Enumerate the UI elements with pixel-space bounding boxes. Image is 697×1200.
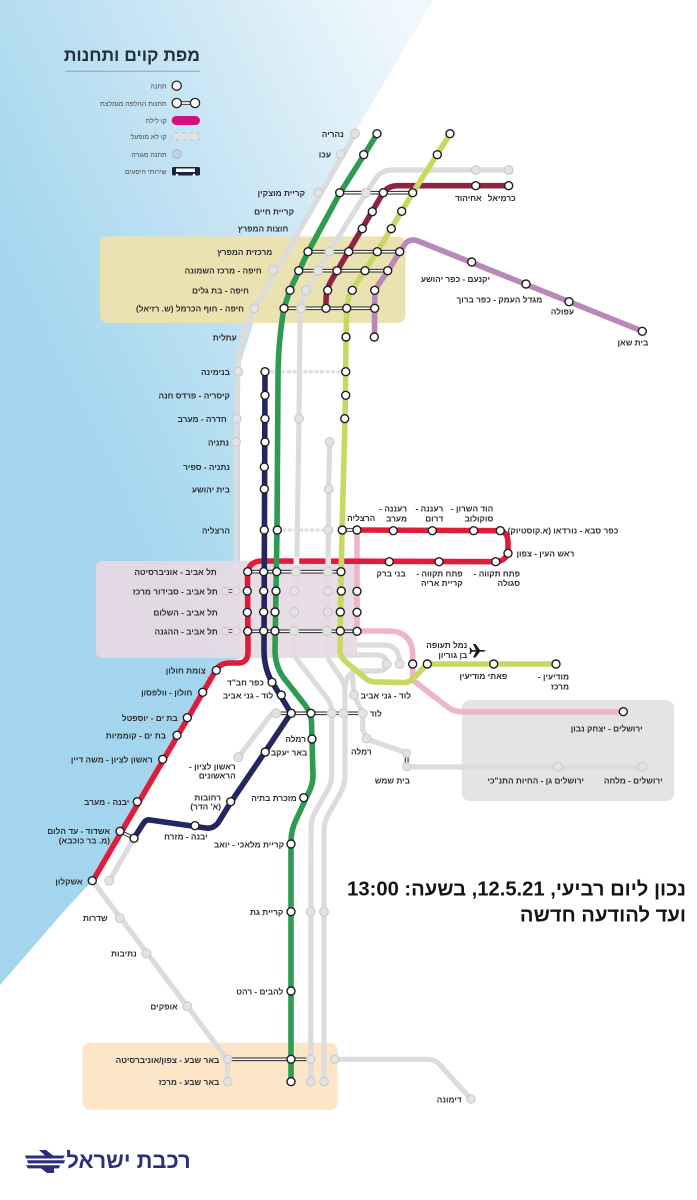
station labels: south coast and centre: (א' הדר) xyxy=(190,802,221,812)
station labels: north and coast: חיפה - בת גלים xyxy=(192,286,249,296)
legend: תחנות החלפה מומלצת xyxy=(100,100,167,108)
station labels: south coast and centre: בת ים - יוספטל xyxy=(122,713,178,723)
station labels: airport, Modi'in, Jerusalem: נמל תעופה xyxy=(426,640,467,650)
station labels: south coast and centre: (מ. בר כוכבא) xyxy=(59,836,110,846)
station labels: Galilee and valley: יקנעם - כפר יהושע xyxy=(421,274,490,284)
legend: קו לילה xyxy=(146,117,167,125)
station labels: south coast and centre: הראשונים xyxy=(199,770,236,780)
line: light pink Herzliya to Jerusalem xyxy=(357,530,623,712)
station labels: north and coast: חיפה - מרכז השמונה xyxy=(185,266,262,276)
station labels: Sharon and Tel Aviv: תל אביב - ההגנה xyxy=(154,626,218,636)
station labels: airport, Modi'in, Jerusalem: מרכז xyxy=(551,682,569,692)
line: green north to south xyxy=(275,134,377,1081)
station labels: Sharon and Tel Aviv xyxy=(133,504,619,636)
station labels: north and coast: עתלית xyxy=(213,332,237,342)
station labels: south coast and centre: באר יעקב xyxy=(271,748,308,758)
station labels: Galilee and valley: כרמיאל xyxy=(488,193,516,203)
station labels: airport, Modi'in, Jerusalem xyxy=(351,640,663,786)
legend: קו לא מופעל xyxy=(131,133,167,141)
station labels: Sharon and Tel Aviv: סוקולוב xyxy=(465,514,493,524)
station labels: Sharon and Tel Aviv: סגולה xyxy=(498,578,520,588)
logo: Israel Railways: רכבת ישראל xyxy=(66,1148,191,1173)
legend: תחנה סגורה xyxy=(131,152,167,159)
inactive grey lines xyxy=(93,134,642,1099)
station labels: south coast and centre: מזכרת בתיה xyxy=(251,793,297,803)
background: sea xyxy=(0,0,433,985)
station labels: south coast and centre: דימונה xyxy=(437,1094,462,1104)
station labels: south coast and centre: יבנה - מערב xyxy=(84,797,129,807)
line: navy xyxy=(134,372,291,838)
notice text xyxy=(347,878,686,926)
station labels: airport, Modi'in, Jerusalem: ירושלים - יצחק נבון xyxy=(571,724,643,734)
station labels: north and coast: בנימינה xyxy=(201,367,231,377)
station labels: Sharon and Tel Aviv: בני ברק xyxy=(376,568,406,578)
title: מפת קוים ותחנות xyxy=(64,45,200,65)
station labels: airport, Modi'in, Jerusalem: בן גוריון xyxy=(438,650,468,660)
closed / inactive stations xyxy=(105,129,647,1103)
line: maroon Karmiel xyxy=(326,186,509,308)
station labels: south coast and centre: כפר חב"ד xyxy=(227,678,264,688)
station labels: Sharon and Tel Aviv: ראש העין - צפון xyxy=(516,548,575,558)
station labels: Sharon and Tel Aviv: פתח תקווה - xyxy=(474,568,520,578)
station labels: south coast and centre: אופקים xyxy=(150,1002,178,1012)
station labels: south coast and centre: רחובות xyxy=(194,792,221,802)
station labels: north and coast: הרצליה xyxy=(202,526,230,536)
station labels: Sharon and Tel Aviv: כפר סבא - נורדאו (א.קוסטיוק) xyxy=(508,526,619,536)
station labels: south coast and centre: קריית מלאכי - יואב xyxy=(214,840,284,850)
station labels: Galilee and valley xyxy=(421,193,649,348)
station labels: north and coast: קריית חיים xyxy=(254,206,294,216)
station labels: Sharon and Tel Aviv: פתח תקווה - xyxy=(416,568,463,578)
station labels: Sharon and Tel Aviv: רעננה - xyxy=(379,504,407,514)
line: red coastal and Sharon xyxy=(93,530,508,881)
legend: תחנה xyxy=(150,84,167,90)
station labels: north and coast: חיפה - חוף הכרמל (ש. רזיאל) xyxy=(136,304,244,314)
interchange links xyxy=(120,193,413,1059)
station labels: south coast and centre: באר שבע - צפון/אוניברסיטה xyxy=(116,1055,220,1065)
station labels: south coast and centre: באר שבע - מרכז xyxy=(159,1077,220,1087)
notice text: ועד להודעה חדשה xyxy=(520,904,686,926)
panel: Jerusalem region xyxy=(462,700,674,801)
legend: שירותי היסעים xyxy=(125,169,167,176)
station labels: Sharon and Tel Aviv: תל אביב - אוניברסיטה xyxy=(134,567,217,577)
station labels: south coast and centre: בת ים - קוממיות xyxy=(106,730,167,740)
station labels: south coast and centre: אשדוד - עד הלום xyxy=(47,826,110,836)
panel: Be'er Sheva region xyxy=(82,1043,338,1110)
line: lime green xyxy=(340,134,556,682)
active stations xyxy=(88,130,646,1086)
station labels: north and coast: נתניה xyxy=(208,438,229,448)
station labels: Galilee and valley: אחיהוד xyxy=(455,193,482,203)
icon: airplane xyxy=(469,644,486,658)
panel: Tel Aviv region xyxy=(96,561,357,658)
station labels: airport, Modi'in, Jerusalem: לוד - גני אביב xyxy=(361,690,411,700)
station labels: north and coast: מרכזית המפרץ xyxy=(217,247,272,257)
line: purple Beit She'an xyxy=(374,240,642,337)
station labels: north and coast xyxy=(136,129,344,536)
station labels: north and coast: קיסריה - פרדס חנה xyxy=(158,390,230,400)
station labels: airport, Modi'in, Jerusalem: בית שמש xyxy=(375,776,411,786)
station labels: Sharon and Tel Aviv: הוד השרון - xyxy=(451,504,493,514)
station labels: north and coast: חוצות המפרץ xyxy=(238,224,288,234)
station labels: Galilee and valley: מגדל העמק - כפר ברוך xyxy=(456,294,542,304)
station labels: south coast and centre: חולון - וולפסון xyxy=(141,688,192,698)
station labels: south coast and centre: ראשון לציון - xyxy=(189,762,236,772)
station labels: Galilee and valley: בית שאן xyxy=(618,338,649,348)
station labels: south coast and centre: צומת חולון xyxy=(166,666,206,676)
notice text: נכון ליום רביעי, 12.5.21, בשעה: 13:00 xyxy=(347,878,686,900)
station labels: south coast and centre: לוד - גני אביב xyxy=(223,690,274,700)
station labels: Sharon and Tel Aviv: מערב xyxy=(386,514,407,524)
station labels: airport, Modi'in, Jerusalem: רמלה xyxy=(351,746,372,756)
station labels: south coast and centre xyxy=(47,666,462,1104)
station labels: south coast and centre: ראשון לציון - משה דיין xyxy=(71,754,153,764)
station labels: Sharon and Tel Aviv: רעננה - xyxy=(416,504,444,514)
station labels: airport, Modi'in, Jerusalem: פאתי מודיעין xyxy=(459,671,507,681)
station labels: Sharon and Tel Aviv: תל אביב - השלום xyxy=(153,608,218,618)
station labels: south coast and centre: שדרות xyxy=(83,913,108,923)
station labels: airport, Modi'in, Jerusalem: ירושלים - מלחה xyxy=(604,776,663,786)
station labels: Sharon and Tel Aviv: הרצליה xyxy=(347,513,375,523)
station labels: south coast and centre: רמלה xyxy=(285,734,306,744)
station labels: north and coast: קריית מוצקין xyxy=(258,188,305,198)
grey crossing over red line xyxy=(294,558,331,565)
station labels: south coast and centre: אשקלון xyxy=(55,876,83,886)
station labels: Sharon and Tel Aviv: דרום xyxy=(425,514,443,524)
station labels: north and coast: נתניה - ספיר xyxy=(183,462,230,472)
station labels: north and coast: נהריה xyxy=(322,129,344,139)
station labels: Galilee and valley: עפולה xyxy=(551,306,574,316)
station labels: south coast and centre: להבים - רהט xyxy=(236,986,284,996)
panel: Haifa region xyxy=(100,236,406,323)
station labels: south coast and centre: נתיבות xyxy=(111,948,137,958)
station labels: south coast and centre: קריית גת xyxy=(250,907,283,917)
station labels: north and coast: חדרה - מערב xyxy=(178,414,227,424)
station labels: Sharon and Tel Aviv: תל אביב - סבידור מרכז xyxy=(133,586,218,596)
legend xyxy=(100,81,200,176)
station labels: south coast and centre: יבנה - מזרח xyxy=(164,832,208,842)
station labels: north and coast: עכו xyxy=(319,150,331,160)
station labels: airport, Modi'in, Jerusalem: ירושלים גן - החיות התנ"כי xyxy=(487,776,584,786)
station labels: north and coast: בית יהושע xyxy=(192,484,231,494)
station labels: airport, Modi'in, Jerusalem: לוד xyxy=(370,708,382,718)
station labels: Sharon and Tel Aviv: קריית אריה xyxy=(421,578,463,588)
station labels: airport, Modi'in, Jerusalem: מודיעין - xyxy=(538,672,569,682)
